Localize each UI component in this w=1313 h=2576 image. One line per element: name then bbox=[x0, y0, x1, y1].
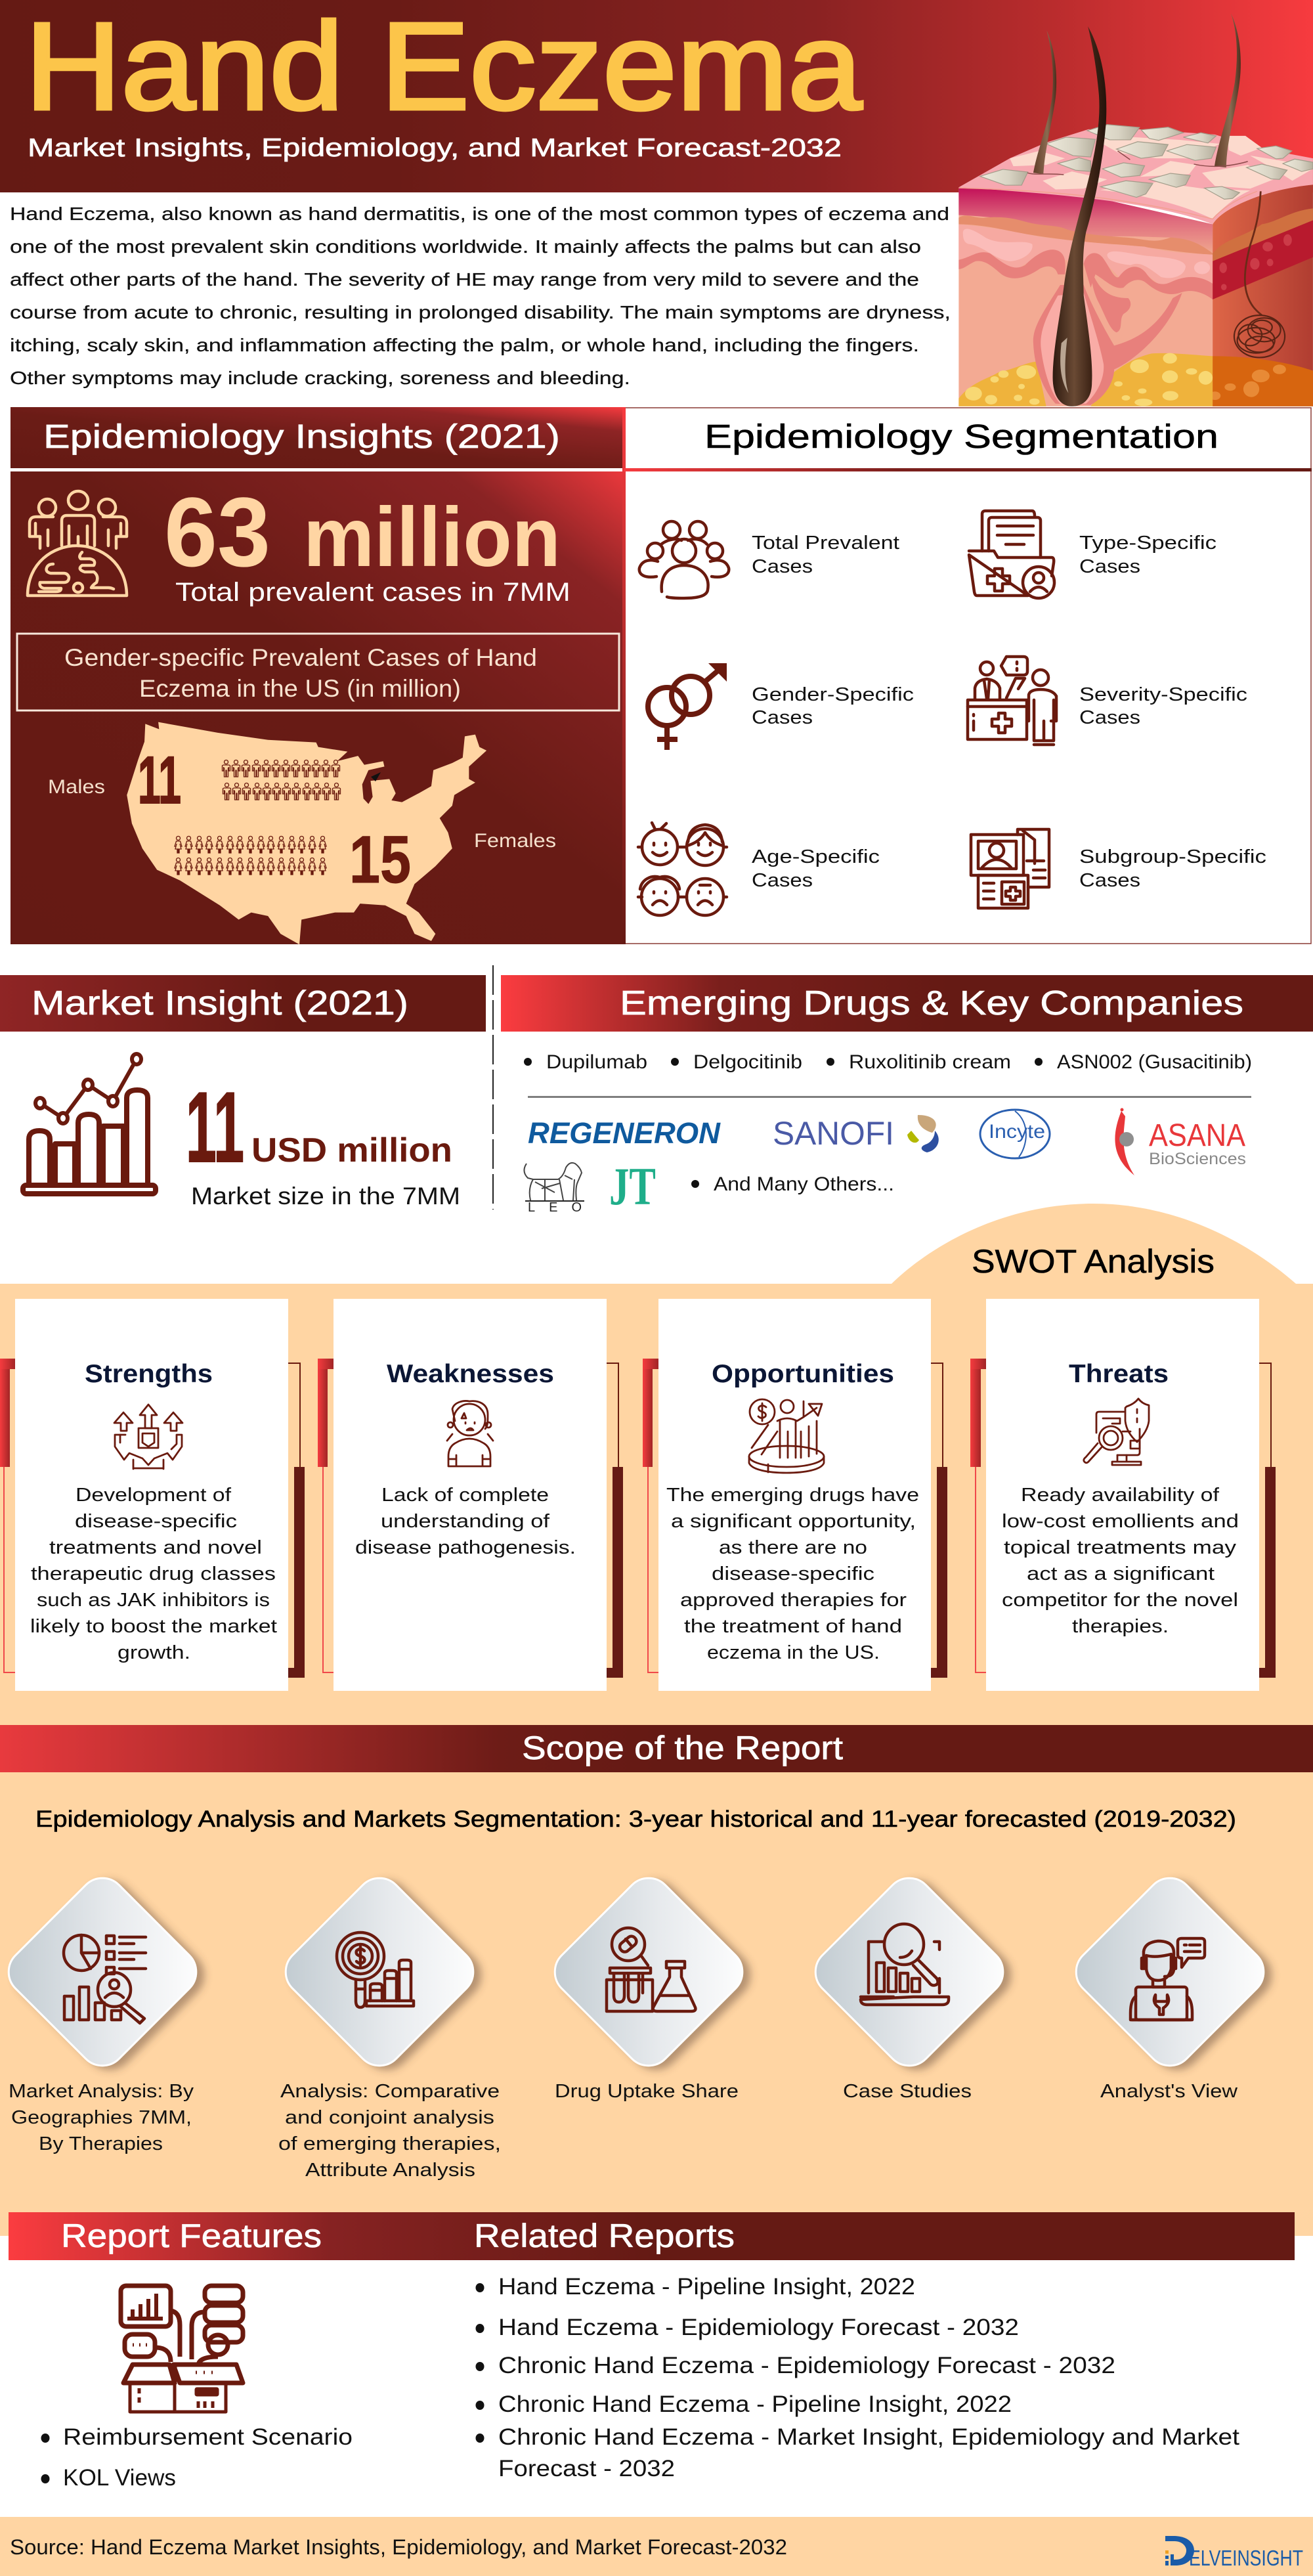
label: comparative analysis: Analysis: Comparative bbox=[280, 2081, 500, 2102]
stat caption: Market size in the 7MM bbox=[191, 1183, 460, 1210]
title: Hand Eczema bbox=[25, 0, 863, 136]
label: subgroup-specific cases bbox=[1079, 846, 1266, 891]
panel: emerging drugs and key companies bbox=[501, 975, 1313, 1216]
sweat gland bbox=[1245, 191, 1262, 315]
card: threats bbox=[970, 1299, 1276, 1691]
list: report features: Reimbursement Scenario bbox=[63, 2424, 353, 2450]
icon: drug uptake share bbox=[607, 1928, 695, 2011]
icon: people on globe bbox=[28, 491, 127, 596]
panel: scope of the report bbox=[0, 1725, 1313, 2181]
intro paragraph: affect other parts of the hand. The severity of HE may range from very mild to severe and the bbox=[10, 269, 919, 290]
text: weaknesses: Lack of complete bbox=[381, 1485, 549, 1506]
logo: Sanofi: SANOFI bbox=[773, 1115, 894, 1152]
statistic: 63 million bbox=[164, 477, 561, 587]
map: United States bbox=[127, 722, 486, 944]
callout: gender-specific prevalence: Gender-specific Prevalent Cases of Hand bbox=[64, 644, 537, 671]
heading band: Related Reports bbox=[474, 2217, 735, 2254]
label: market analysis: Geographies 7MM, bbox=[11, 2107, 192, 2128]
list: related reports: Hand Eczema - Epidemiology Forecast - 2032 bbox=[498, 2315, 1019, 2340]
intro paragraph: Other symptoms may include cracking, soreness and bleeding. bbox=[10, 368, 630, 388]
label: market analysis bbox=[9, 2081, 194, 2154]
icon: market growth chart bbox=[23, 1054, 156, 1194]
label: drug uptake share: Drug Uptake Share bbox=[555, 2081, 739, 2102]
card: threats: Threats bbox=[1069, 1360, 1169, 1388]
panel: epidemiology insights bbox=[11, 407, 622, 944]
follicle sheath bbox=[1033, 285, 1182, 405]
male count: 11 bbox=[138, 743, 181, 818]
label: age-specific cases bbox=[752, 846, 880, 891]
icon: subgroup-specific cases bbox=[971, 829, 1049, 908]
text: opportunities: approved therapies for bbox=[680, 1590, 907, 1611]
text: strengths: disease-specific bbox=[75, 1511, 237, 1532]
callout: gender-specific prevalence: Eczema in the US (in million) bbox=[139, 675, 461, 702]
logo: Asana BioSciences bbox=[1115, 1108, 1246, 1175]
label: type-specific cases bbox=[1079, 533, 1216, 577]
icon: strengths bbox=[114, 1405, 183, 1469]
card: strengths bbox=[0, 1299, 305, 1691]
icon: threats bbox=[1084, 1399, 1149, 1465]
heading: scope of the report bbox=[0, 1725, 1313, 1772]
text: weaknesses: disease pathogenesis. bbox=[355, 1537, 576, 1558]
statistic: 63 million: million bbox=[303, 491, 561, 584]
text: strengths bbox=[30, 1485, 277, 1663]
icon: opportunities bbox=[749, 1399, 824, 1473]
text: strengths: Development of bbox=[75, 1485, 232, 1506]
icon: market analysis bbox=[64, 1935, 146, 2023]
logo: Asana BioSciences: BioSciences bbox=[1149, 1150, 1246, 1168]
intro paragraph: Hand Eczema, also known as hand dermatitis, is one of the most common types of eczema and bbox=[10, 204, 949, 224]
heading: emerging drugs: Emerging Drugs & Key Companies bbox=[620, 984, 1243, 1022]
label: market analysis: Market Analysis: By bbox=[9, 2081, 194, 2102]
text: strengths: treatments and novel bbox=[49, 1537, 262, 1558]
label: severity-specific cases: Cases bbox=[1079, 707, 1140, 728]
intro paragraph: itching, scaly skin, and inflammation affecting the palm, or whole hand, including the fingers. bbox=[10, 335, 919, 355]
unit: USD million: USD million bbox=[251, 1131, 452, 1169]
list: related reports: Chronic Hand Eczema - Epidemiology Forecast - 2032 bbox=[498, 2353, 1115, 2378]
subheading: segmentation period: Epidemiology Analysis and Markets Segmentation: 3-year historical and 11-year forecasted (2019-2032) bbox=[35, 1806, 1236, 1832]
icon: severity-specific cases bbox=[968, 657, 1056, 745]
label: severity-specific cases bbox=[1079, 684, 1247, 728]
icon: report features box bbox=[121, 2286, 243, 2412]
skin flakes bbox=[980, 125, 1313, 199]
callout: gender-specific prevalence bbox=[17, 634, 619, 710]
text: threats: act as a significant bbox=[1027, 1563, 1215, 1584]
label: comparative analysis bbox=[278, 2081, 501, 2181]
illustration: skin cross-section with hairs bbox=[958, 13, 1313, 406]
text: threats: topical treatments may bbox=[1004, 1537, 1237, 1558]
text: weaknesses: understanding of bbox=[381, 1511, 550, 1532]
item: drug uptake share bbox=[545, 1868, 752, 2102]
text: strengths: such as JAK inhibitors is bbox=[37, 1590, 270, 1611]
logo: LEO Pharma: LEO bbox=[528, 1200, 582, 1215]
item: analyst's view bbox=[1066, 1868, 1274, 2102]
stat caption: Total prevalent cases in 7MM bbox=[175, 578, 570, 607]
text: strengths: therapeutic drug classes bbox=[31, 1563, 276, 1584]
text: opportunities: as there are no bbox=[719, 1537, 867, 1558]
label: total prevalent cases: Total Prevalent bbox=[752, 533, 899, 554]
label: comparative analysis: of emerging therapies, bbox=[278, 2133, 501, 2154]
panel: market insight bbox=[0, 975, 486, 1210]
heading: market insight bbox=[0, 975, 486, 1032]
label: type-specific cases: Type-Specific bbox=[1079, 533, 1216, 554]
label: market analysis: By Therapies bbox=[39, 2133, 163, 2154]
list: related reports: Hand Eczema - Pipeline Insight, 2022 bbox=[498, 2274, 915, 2300]
icon: total prevalent cases bbox=[639, 521, 729, 598]
panel: SWOT analysis bbox=[0, 1204, 1313, 2236]
logo: Asana BioSciences: ASANA bbox=[1149, 1118, 1245, 1153]
text: opportunities bbox=[666, 1485, 919, 1663]
subtitle: Market Insights, Epidemiology, and Market Forecast-2032 bbox=[28, 134, 842, 162]
text: threats bbox=[1002, 1485, 1239, 1637]
list: report features bbox=[41, 2424, 353, 2491]
header banner bbox=[0, 0, 1313, 192]
heading: emerging drugs bbox=[501, 975, 1313, 1032]
tab: SWOT analysis bbox=[892, 1204, 1296, 1284]
label: males: Males bbox=[48, 776, 105, 798]
heading: epidemiology segmentation: Epidemiology Segmentation bbox=[704, 418, 1218, 455]
list: report features: KOL Views bbox=[63, 2465, 176, 2491]
logo: JT: JT bbox=[609, 1156, 656, 1216]
text: threats: low-cost emollients and bbox=[1002, 1511, 1239, 1532]
icon: analyst's view bbox=[1130, 1938, 1205, 2020]
card: strengths: Strengths bbox=[85, 1360, 213, 1388]
footer bbox=[0, 2517, 1313, 2576]
item: comparative analysis bbox=[276, 1868, 501, 2181]
icon: type-specific cases bbox=[969, 511, 1054, 598]
logo: Incyte bbox=[980, 1110, 1050, 1158]
divider bbox=[492, 965, 494, 1210]
subcutaneous fat bbox=[958, 353, 1213, 406]
heading band bbox=[9, 2212, 1295, 2260]
hair right bbox=[1215, 13, 1241, 167]
statistic: 63 million: 63 bbox=[164, 477, 270, 587]
list: related reports: Forecast - 2032 bbox=[498, 2456, 675, 2481]
label: age-specific cases: Cases bbox=[752, 870, 813, 891]
heading: scope of the report: Scope of the Report bbox=[522, 1730, 843, 1766]
text: opportunities: disease-specific bbox=[712, 1563, 874, 1584]
logo: Incyte: Incyte bbox=[989, 1121, 1045, 1143]
card: weaknesses: Weaknesses bbox=[387, 1360, 554, 1388]
label: comparative analysis: and conjoint analysis bbox=[285, 2107, 494, 2128]
section heading: epidemiology insights bbox=[11, 407, 622, 468]
statistic: 11: 11 bbox=[186, 1072, 244, 1183]
card: opportunities: Opportunities bbox=[712, 1360, 894, 1388]
intro paragraph: course from acute to chronic, resulting in prolonged disability. The main symptoms are dryness, bbox=[10, 302, 951, 322]
top surface bbox=[958, 129, 1313, 225]
front face base bbox=[958, 187, 1213, 406]
logo: DelveInsight bbox=[1165, 2536, 1303, 2570]
right face base bbox=[1213, 185, 1313, 406]
text: strengths: growth. bbox=[118, 1642, 190, 1663]
text: opportunities: a significant opportunity, bbox=[671, 1511, 916, 1532]
label: analyst's view: Analyst's View bbox=[1100, 2081, 1238, 2102]
label: severity-specific cases: Severity-Specific bbox=[1079, 684, 1247, 705]
source line: Source: Hand Eczema Market Insights, Epidemiology, and Market Forecast-2032 bbox=[10, 2535, 787, 2559]
text: threats: Ready availability of bbox=[1021, 1485, 1220, 1506]
hair left bbox=[1033, 30, 1056, 174]
drug list: ASN002 (Gusacitinib) bbox=[1057, 1051, 1252, 1073]
label: gender-specific cases: Gender-Specific bbox=[752, 684, 914, 705]
card: weaknesses bbox=[318, 1299, 623, 1691]
and many others: And Many Others... bbox=[714, 1173, 894, 1195]
text: weaknesses bbox=[355, 1485, 576, 1558]
pictogram: males bbox=[222, 760, 340, 800]
front face layers bbox=[958, 187, 1213, 253]
card: opportunities bbox=[643, 1299, 947, 1691]
text: strengths: likely to boost the market bbox=[30, 1616, 277, 1637]
drug list bbox=[524, 1051, 1252, 1073]
text: opportunities: the treatment of hand bbox=[684, 1616, 902, 1637]
heading band: Report Features bbox=[61, 2217, 322, 2254]
intro paragraph: one of the most prevalent skin conditions worldwide. It mainly affects the palms but can also bbox=[10, 236, 921, 257]
list: related reports: Chronic Hand Eczema - Market Insight, Epidemiology and Market bbox=[498, 2424, 1239, 2450]
drug list: Delgocitinib bbox=[693, 1051, 802, 1073]
logo: Regeneron: REGENERON bbox=[528, 1116, 721, 1150]
text: opportunities: The emerging drugs have bbox=[666, 1485, 919, 1506]
label: case studies: Case Studies bbox=[843, 2081, 972, 2102]
icon: gender-specific cases bbox=[648, 663, 727, 750]
label: total prevalent cases bbox=[752, 533, 899, 577]
heading: market insight: Market Insight (2021) bbox=[32, 984, 408, 1022]
label: subgroup-specific cases: Subgroup-Specific bbox=[1079, 846, 1266, 867]
label: comparative analysis: Attribute Analysis bbox=[305, 2160, 475, 2181]
panel: report features and related reports bbox=[9, 2212, 1295, 2491]
logo: LEO Pharma bbox=[524, 1163, 584, 1215]
icon: age-specific cases bbox=[638, 823, 727, 915]
hair main bbox=[1053, 26, 1106, 406]
panel: epidemiology segmentation bbox=[622, 407, 1312, 944]
text: threats: therapies. bbox=[1072, 1616, 1169, 1637]
drug list: Ruxolitinib cream bbox=[849, 1051, 1011, 1073]
list: related reports: Chronic Hand Eczema - Pipeline Insight, 2022 bbox=[498, 2391, 1012, 2417]
tab: SWOT analysis: SWOT Analysis bbox=[972, 1243, 1215, 1280]
label: total prevalent cases: Cases bbox=[752, 556, 813, 577]
list: related reports bbox=[475, 2274, 1239, 2481]
pictogram: females bbox=[175, 837, 326, 875]
item: market analysis bbox=[0, 1868, 206, 2154]
text: opportunities: eczema in the US. bbox=[707, 1642, 880, 1663]
text: threats: competitor for the novel bbox=[1002, 1590, 1238, 1611]
female count: 15 bbox=[349, 822, 411, 897]
drug list: Dupilumab bbox=[546, 1051, 647, 1073]
item: case studies bbox=[806, 1868, 1013, 2102]
label: gender-specific cases bbox=[752, 684, 914, 728]
label: females: Females bbox=[474, 830, 556, 852]
icon: comparative analysis bbox=[337, 1932, 414, 2007]
intro paragraph bbox=[10, 204, 951, 388]
label: gender-specific cases: Cases bbox=[752, 707, 813, 728]
label: age-specific cases: Age-Specific bbox=[752, 846, 880, 867]
label: type-specific cases: Cases bbox=[1079, 556, 1140, 577]
icon: case studies bbox=[861, 1924, 949, 2005]
icon: weaknesses bbox=[447, 1401, 493, 1466]
label: subgroup-specific cases: Cases bbox=[1079, 870, 1140, 891]
section heading: epidemiology insights: Epidemiology Insights (2021) bbox=[43, 418, 560, 455]
